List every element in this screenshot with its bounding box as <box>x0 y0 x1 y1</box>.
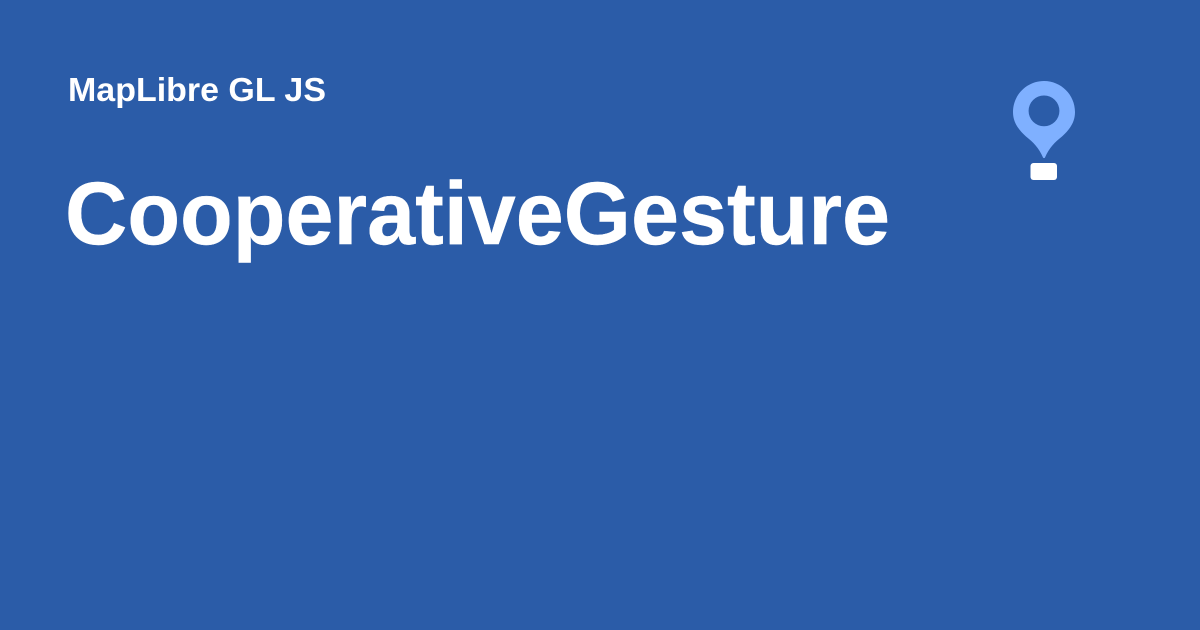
icon: map pin with label <box>1013 81 1075 180</box>
title: CooperativeGesture: CooperativeGesture <box>65 163 890 263</box>
eyebrow: MapLibre GL JS: MapLibre GL JS <box>68 71 326 108</box>
